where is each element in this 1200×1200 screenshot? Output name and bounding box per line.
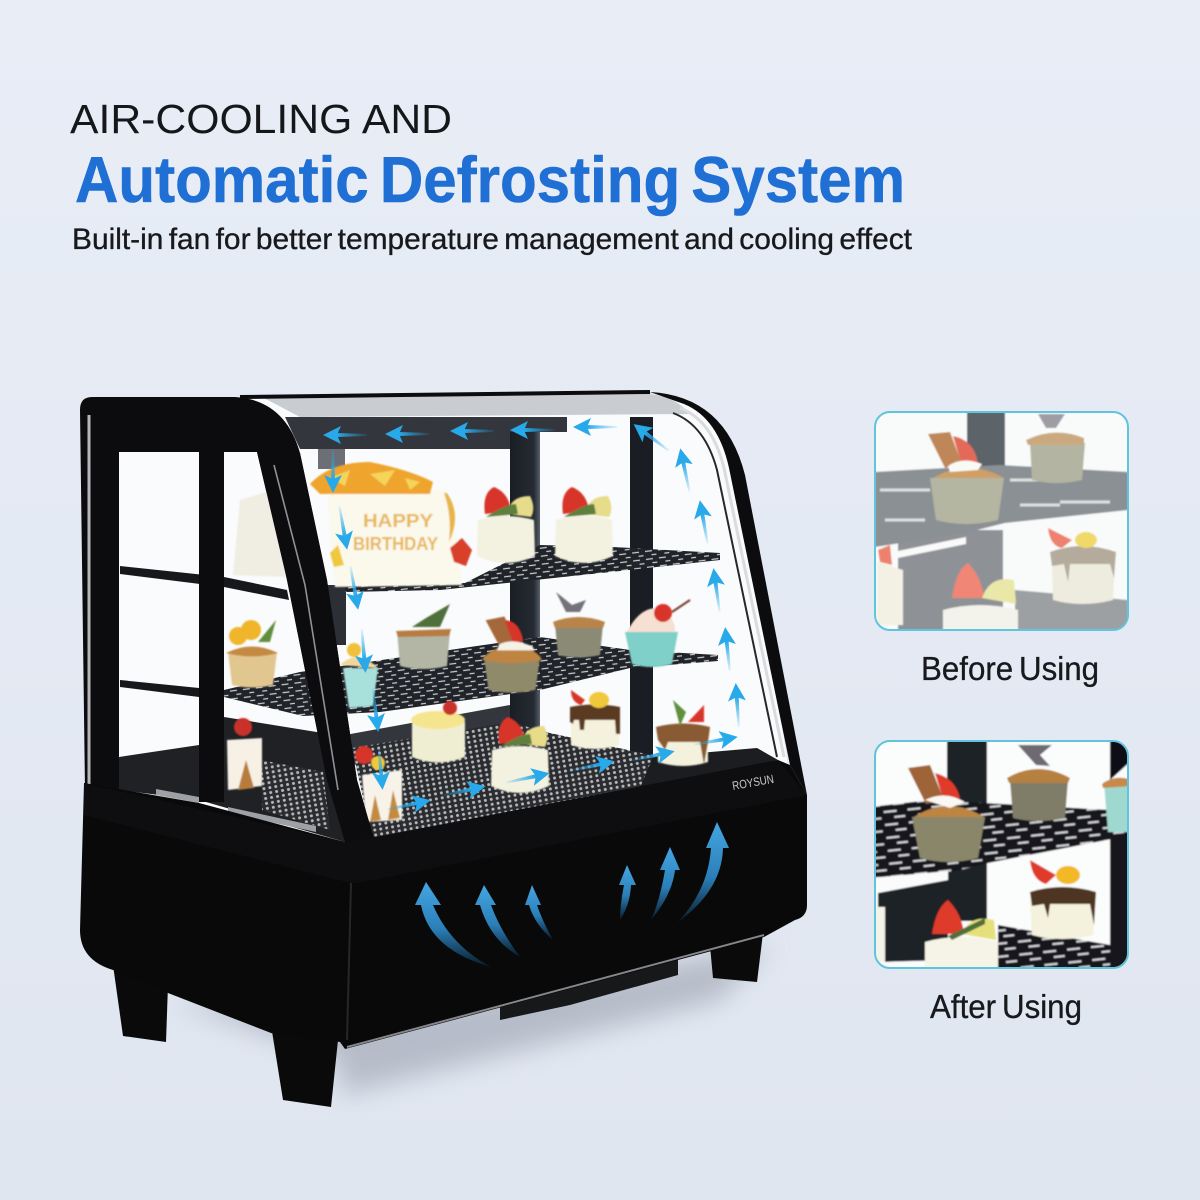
base top lip xyxy=(84,760,807,883)
rear posts xyxy=(318,417,653,767)
subtitle: Built-in fan for better temperature management and cooling effect xyxy=(72,223,913,256)
airflow arrows xyxy=(323,417,748,818)
teal cup left xyxy=(340,643,378,708)
lower left dessert xyxy=(227,718,262,790)
top shelf xyxy=(120,545,720,600)
fridge legs xyxy=(113,925,764,1107)
chocolate wafer cup xyxy=(482,617,542,693)
lower caramel dessert xyxy=(355,746,402,822)
front pillar xyxy=(257,452,375,842)
left frame highlight xyxy=(88,415,90,785)
birthday cake: HAPPY xyxy=(363,511,433,531)
floor shadow xyxy=(170,945,770,1095)
after photo xyxy=(870,737,1132,972)
panel: before using xyxy=(870,408,1132,634)
drip pudding xyxy=(570,690,620,749)
base crease xyxy=(347,883,351,1040)
caramel pudding xyxy=(656,700,710,766)
olive cup xyxy=(553,592,605,658)
top silver band xyxy=(262,394,690,417)
teal cupcake xyxy=(625,600,690,667)
middle shelf xyxy=(120,637,718,716)
label: after using: After Using xyxy=(930,988,1082,1025)
base cabinet xyxy=(80,760,807,1049)
left tan cup with fruit xyxy=(226,620,278,688)
side floor mesh xyxy=(261,760,330,830)
side floor silver strips xyxy=(156,789,316,832)
top shelf cakes xyxy=(477,487,535,563)
lower back wall xyxy=(345,705,510,765)
top dark interior band xyxy=(285,417,567,449)
heading: automatic defrosting system: Automatic Defrosting System xyxy=(75,143,905,216)
glass cabinet interior xyxy=(85,394,790,860)
label: before using: Before Using xyxy=(921,650,1099,687)
interior floor mesh xyxy=(352,722,778,838)
front pillar highlight xyxy=(274,465,338,790)
fan arrows xyxy=(415,822,729,967)
center strawberry cake xyxy=(491,717,549,793)
before photo xyxy=(870,408,1132,634)
after photo border xyxy=(875,741,1128,968)
desserts xyxy=(226,462,710,822)
underside drawer xyxy=(500,950,678,1020)
brand label: ROYSUN xyxy=(731,772,775,793)
birthday cake: BIRTHDAY xyxy=(353,534,438,554)
left frame and post xyxy=(80,397,375,842)
base silver line xyxy=(347,935,764,1047)
right floor strip xyxy=(640,748,778,788)
before photo border xyxy=(875,412,1128,630)
heading: air-cooling: AIR-COOLING AND xyxy=(70,96,452,142)
display fridge xyxy=(80,392,807,1107)
birthday cake xyxy=(233,462,472,587)
side floor xyxy=(119,717,345,842)
curved top and right frame xyxy=(240,392,807,795)
grey cup xyxy=(396,604,451,669)
white cake xyxy=(411,701,465,762)
panel: after using xyxy=(870,737,1132,972)
